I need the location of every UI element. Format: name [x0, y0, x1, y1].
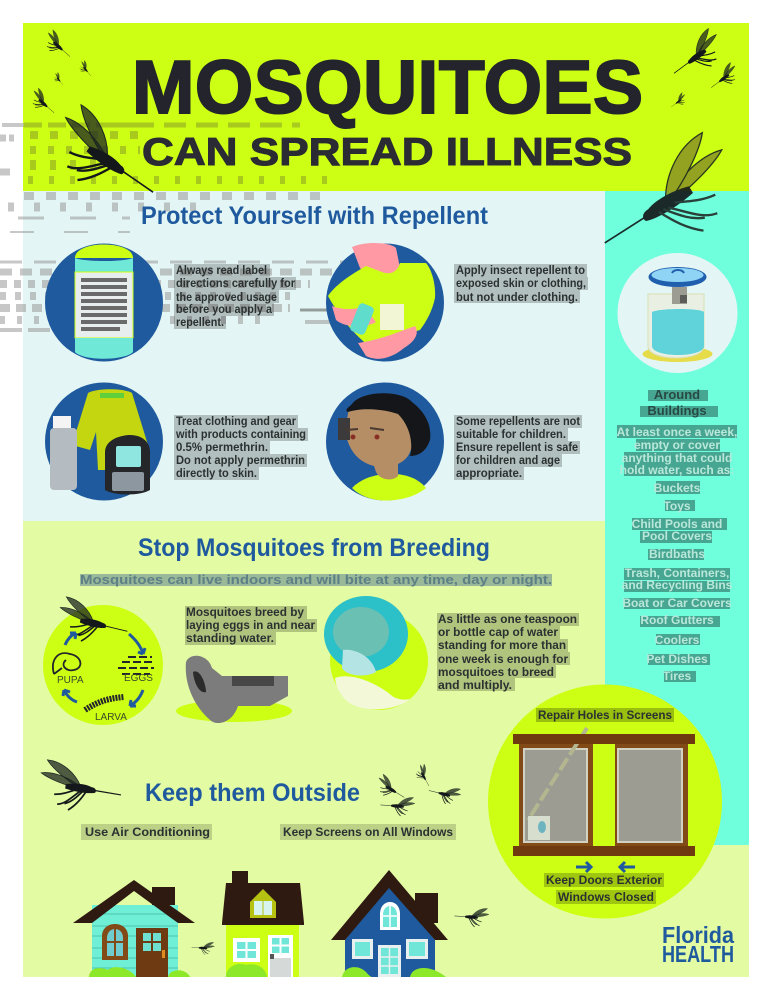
- text: keep doors closed: Keep Doors Exterior: [546, 873, 662, 887]
- icon: small mosquitoes top left: [26, 29, 95, 119]
- chart: mosquito life cycle: [43, 596, 163, 725]
- text: around buildings list: Coolers: [655, 633, 700, 647]
- text: read label: repellent.: [176, 315, 224, 329]
- icon: pupa: [53, 653, 80, 674]
- panel: lower section background: [23, 521, 749, 977]
- icon: aqua house: [73, 880, 195, 977]
- text: around buildings list: Around: [654, 387, 700, 402]
- text: around buildings list: empty or cover: [634, 438, 720, 452]
- logo: Florida Health: HEALTH: [662, 941, 734, 967]
- text: around buildings list: At least once a week,: [617, 425, 737, 439]
- text: around buildings list: Pet Dishes: [646, 652, 708, 666]
- decorative compression ghosts: [0, 125, 360, 330]
- icon: treat clothing and gear: [45, 382, 163, 500]
- text: read label: the approved usage: [176, 290, 277, 304]
- icon: large mosquito right: [582, 129, 753, 277]
- text: around buildings list: Pool Covers: [642, 529, 712, 543]
- text: around buildings list: Birdbaths: [649, 547, 705, 561]
- icon: child portrait: [326, 382, 444, 500]
- panel: around buildings column background: [605, 191, 749, 845]
- life cycle arrows: [63, 633, 145, 706]
- icon: mosquito right of blue house: [454, 906, 489, 928]
- icon: larva: [85, 697, 124, 710]
- label: life stages: LARVA: [95, 712, 127, 723]
- title: [132, 45, 643, 174]
- text: apply repellent: but not under clothing.: [456, 290, 578, 304]
- text: around buildings list: Boat or Car Covers: [622, 596, 732, 610]
- text: around buildings list: anything that could: [622, 451, 732, 465]
- icon: closing arrows: [576, 862, 635, 872]
- text: breed by laying eggs: laying eggs in and near: [186, 618, 315, 632]
- text: around buildings list: and Recycling Bins: [622, 578, 733, 592]
- panel: repellent section background: [23, 191, 605, 521]
- text: treat clothing: 0.5% permethrin.: [176, 440, 268, 454]
- text: treat clothing: Do not apply permethrin: [176, 453, 305, 467]
- title: MOSQUITOES: [132, 45, 643, 129]
- text: around buildings list: Roof Gutters: [640, 613, 714, 627]
- text: children: [454, 414, 582, 480]
- text: apply repellent: exposed skin or clothing,: [456, 276, 586, 290]
- icon: mosquito swarm right of heading: [372, 763, 462, 817]
- text: apply repellent: Apply insect repellent to: [456, 263, 585, 277]
- text: around buildings list: Buckets: [654, 481, 701, 495]
- icon: adult mosquito: [54, 596, 132, 650]
- icon: repellent bottle label: [45, 244, 163, 362]
- heading: protect yourself: Protect Yourself with Repellent: [141, 202, 489, 230]
- text: read label: directions carefully for: [176, 276, 295, 290]
- text: teaspoon of water: mosquitoes to breed: [438, 665, 554, 679]
- text: around buildings list: Toys: [663, 499, 691, 513]
- icon: lime house: [222, 871, 304, 977]
- text: keep screens: Keep Screens on All Windows: [283, 825, 453, 839]
- text: use air conditioning: Use Air Conditioning: [85, 825, 210, 839]
- text: treat clothing: Treat clothing and gear: [176, 414, 296, 428]
- heading: keep them outside: Keep them Outside: [145, 779, 360, 807]
- icon: large mosquito left: [41, 102, 172, 218]
- label: life stages: EGGS: [124, 673, 153, 684]
- text: breed by laying eggs: [185, 605, 317, 645]
- title: CAN SPREAD ILLNESS: [142, 131, 632, 174]
- text: teaspoon of water: standing for more than: [438, 638, 566, 652]
- text: keep doors closed: [544, 873, 664, 904]
- logo: Florida Health: [662, 922, 734, 967]
- text: around buildings list: Trash, Containers,: [625, 566, 729, 580]
- icon: small mosquitoes top right: [664, 27, 742, 111]
- text: teaspoon of water: and multiply.: [438, 678, 512, 692]
- text: children: Some repellents are not: [456, 414, 580, 428]
- text: teaspoon of water: one week is enough for: [438, 652, 568, 666]
- text: read label: Always read label: [176, 263, 267, 277]
- icon: eggs: [118, 657, 155, 674]
- text: keep doors closed: Windows Closed: [558, 890, 654, 904]
- logo: Florida Health: Florida: [662, 922, 734, 948]
- text: teaspoon of water: As little as one teaspoon: [438, 612, 577, 626]
- icon: mosquito left of heading: [37, 759, 124, 817]
- heading: stop breeding: Stop Mosquitoes from Breeding: [138, 534, 490, 562]
- text: treat clothing: with products containing: [175, 427, 306, 441]
- label: life stages: [57, 673, 153, 723]
- text: around buildings list: Tires: [663, 669, 692, 683]
- text: children: Ensure repellent is safe: [456, 440, 578, 454]
- icon: screens callout circle: [488, 684, 722, 918]
- text: read label: before you apply a: [176, 302, 272, 316]
- text: repair holes: Repair Holes in Screens: [538, 708, 672, 722]
- text: around buildings list: Buildings: [647, 403, 707, 418]
- icon: clogged gutter: [176, 656, 292, 723]
- text: teaspoon of water: [437, 612, 579, 692]
- icon: bottle cap: [324, 596, 428, 710]
- icon: mosquito near aqua house: [191, 941, 215, 955]
- label: life stages: PUPA: [57, 675, 84, 686]
- text: treat clothing: directly to skin.: [176, 466, 257, 480]
- text: children: suitable for children.: [456, 427, 566, 441]
- icon: water container with lid: [618, 253, 738, 373]
- panel: header background: [23, 23, 749, 191]
- text: children: appropriate.: [456, 466, 522, 480]
- text: read label: [174, 263, 296, 329]
- text: indoors subheading: Mosquitoes can live indoors and will bite at any time, day or night.: [80, 572, 552, 587]
- text: around buildings list: [617, 387, 737, 683]
- text: breed by laying eggs: Mosquitoes breed by: [186, 605, 304, 619]
- icon: blue house: [331, 870, 448, 977]
- text: around buildings list: hold water, such as:: [620, 463, 734, 477]
- text: around buildings list: Child Pools and: [632, 517, 722, 531]
- icon: window frames: [513, 728, 695, 856]
- icon: person applying repellent: [326, 243, 444, 362]
- text: children: for children and age: [456, 453, 560, 467]
- text: teaspoon of water: or bottle cap of water: [438, 625, 558, 639]
- text: treat clothing: [174, 414, 308, 480]
- text: apply repellent: [454, 263, 588, 304]
- text: breed by laying eggs: standing water.: [186, 631, 274, 645]
